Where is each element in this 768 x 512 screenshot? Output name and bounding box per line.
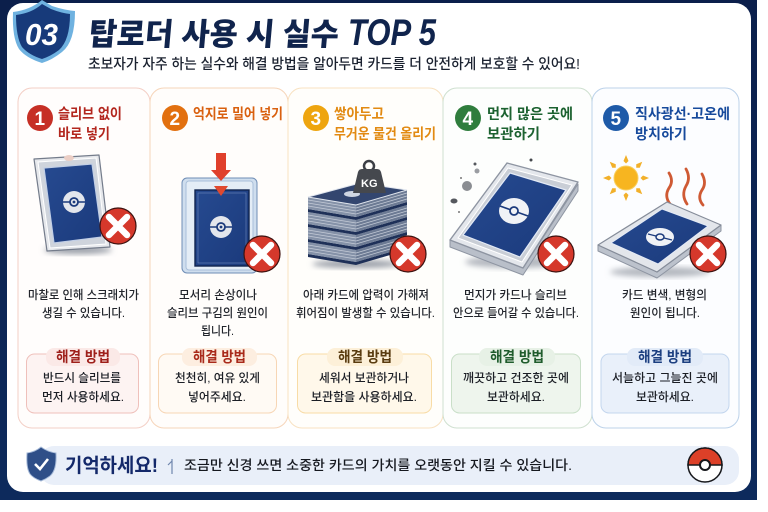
number badge 4 [455,105,481,131]
icon: sun and heat on card [598,155,726,278]
heading 4: 먼지 많은 곳에 [487,106,573,123]
solution 1: 해결 방법 [56,349,110,366]
solution 1 [26,348,138,413]
heading 1 [58,106,122,143]
icon: bare top loader [34,155,136,254]
number badge 4: 4 [462,109,474,130]
heading 2: 억지로 밀어 넣기 [193,106,283,123]
description 4: 안으로 들어갈 수 있습니다. [453,306,579,320]
subtitle: 초보자가 자주 하는 실수와 해결 방법을 알아두면 카드를 더 안전하게 보호할 수 있어요! [88,56,580,73]
solution 3: 세워서 보관하거나 [319,371,409,385]
number badge 5 [603,105,629,131]
title: TOP 5 [348,12,437,53]
icon: poke ball [688,448,722,482]
number badge 2 [162,105,188,131]
panel: mistake 2 [150,88,288,428]
icon: stacked cards under weight: KG [361,178,378,190]
remember text: 조금만 신경 쓰면 소중한 카드의 가치를 오랫동안 지킬 수 있습니다. [184,458,572,473]
number badge 5: 5 [610,109,622,130]
description 5 [622,287,707,320]
heading 3 [334,106,436,143]
description 2 [167,288,268,338]
solution 2: 천천히, 여유 있게 [175,370,260,385]
solution 5: 서늘하고 그늘진 곳에 [612,371,718,385]
panel: mistake 1 [18,88,150,428]
solution 5: 해결 방법 [638,349,692,366]
solution 2: 해결 방법 [193,349,246,366]
solution 4: 깨끗하고 건조한 곳에 [463,371,569,385]
solution 5: 보관하세요. [636,390,694,404]
description 2: 슬리브 구김의 원인이 [167,306,268,320]
icon: stacked cards under weight [308,161,426,272]
description 4: 먼지가 카드나 슬리브 [464,288,567,302]
number badge 2: 2 [170,109,180,130]
heading 3: 무거운 물건 올리기 [334,126,436,143]
description 3: 휘어짐이 발생할 수 있습니다. [296,305,435,320]
divider mark [168,459,172,474]
number badge 1 [27,105,53,131]
callout: remember bar [27,446,739,485]
solution 2 [158,348,276,413]
description 5: 원인이 됩니다. [630,306,700,320]
panel: mistake 5 [592,88,739,428]
heading 5: 방치하기 [635,126,687,143]
number badge 3: 3 [310,109,321,130]
shield badge 03 [13,0,75,63]
description 1: 생길 수 있습니다. [42,306,125,320]
heading 5 [635,106,730,143]
heading 4 [487,106,573,143]
heading 5: 직사광선·고온에 [635,106,730,123]
solution 2: 넣어주세요. [188,390,246,404]
icon: shield check [27,447,56,481]
solution 4: 해결 방법 [490,349,544,366]
title: 탑로더 사용 시 실수 [87,17,340,52]
shield badge 03: 03 [25,17,58,52]
icon: forcing card into sleeve [182,153,280,273]
description 2: 됩니다. [201,324,234,338]
solution 1: 먼저 사용하세요. [42,390,124,404]
solution 5 [601,348,729,413]
panel: mistake 4 [443,88,592,428]
solution 3: 보관함을 사용하세요. [311,389,417,404]
solution 3 [298,348,432,413]
heading 4: 보관하기 [487,126,540,143]
panel: mistake 3 [288,88,443,428]
description 4 [453,288,579,320]
heading 1: 슬리브 없이 [58,106,122,123]
icon: dusty card [450,158,578,275]
number badge 3 [303,105,329,131]
remember heading: 기억하세요! [65,455,158,477]
description 2: 모서리 손상이나 [179,288,257,302]
description 1 [28,288,139,320]
solution 3: 해결 방법 [338,349,392,366]
number badge 1: 1 [34,109,46,130]
description 3 [296,288,435,320]
solution 4 [452,348,580,413]
solution 1: 반드시 슬리브를 [43,371,121,385]
title [87,12,437,53]
description 5: 카드 변색, 변형의 [622,287,707,302]
solution 4: 보관하세요. [487,390,545,404]
description 3: 아래 카드에 압력이 가해져 [303,288,429,302]
heading 1: 바로 넣기 [58,126,110,143]
description 1: 마찰로 인해 스크래치가 [28,288,139,302]
heading 3: 쌓아두고 [334,106,384,123]
